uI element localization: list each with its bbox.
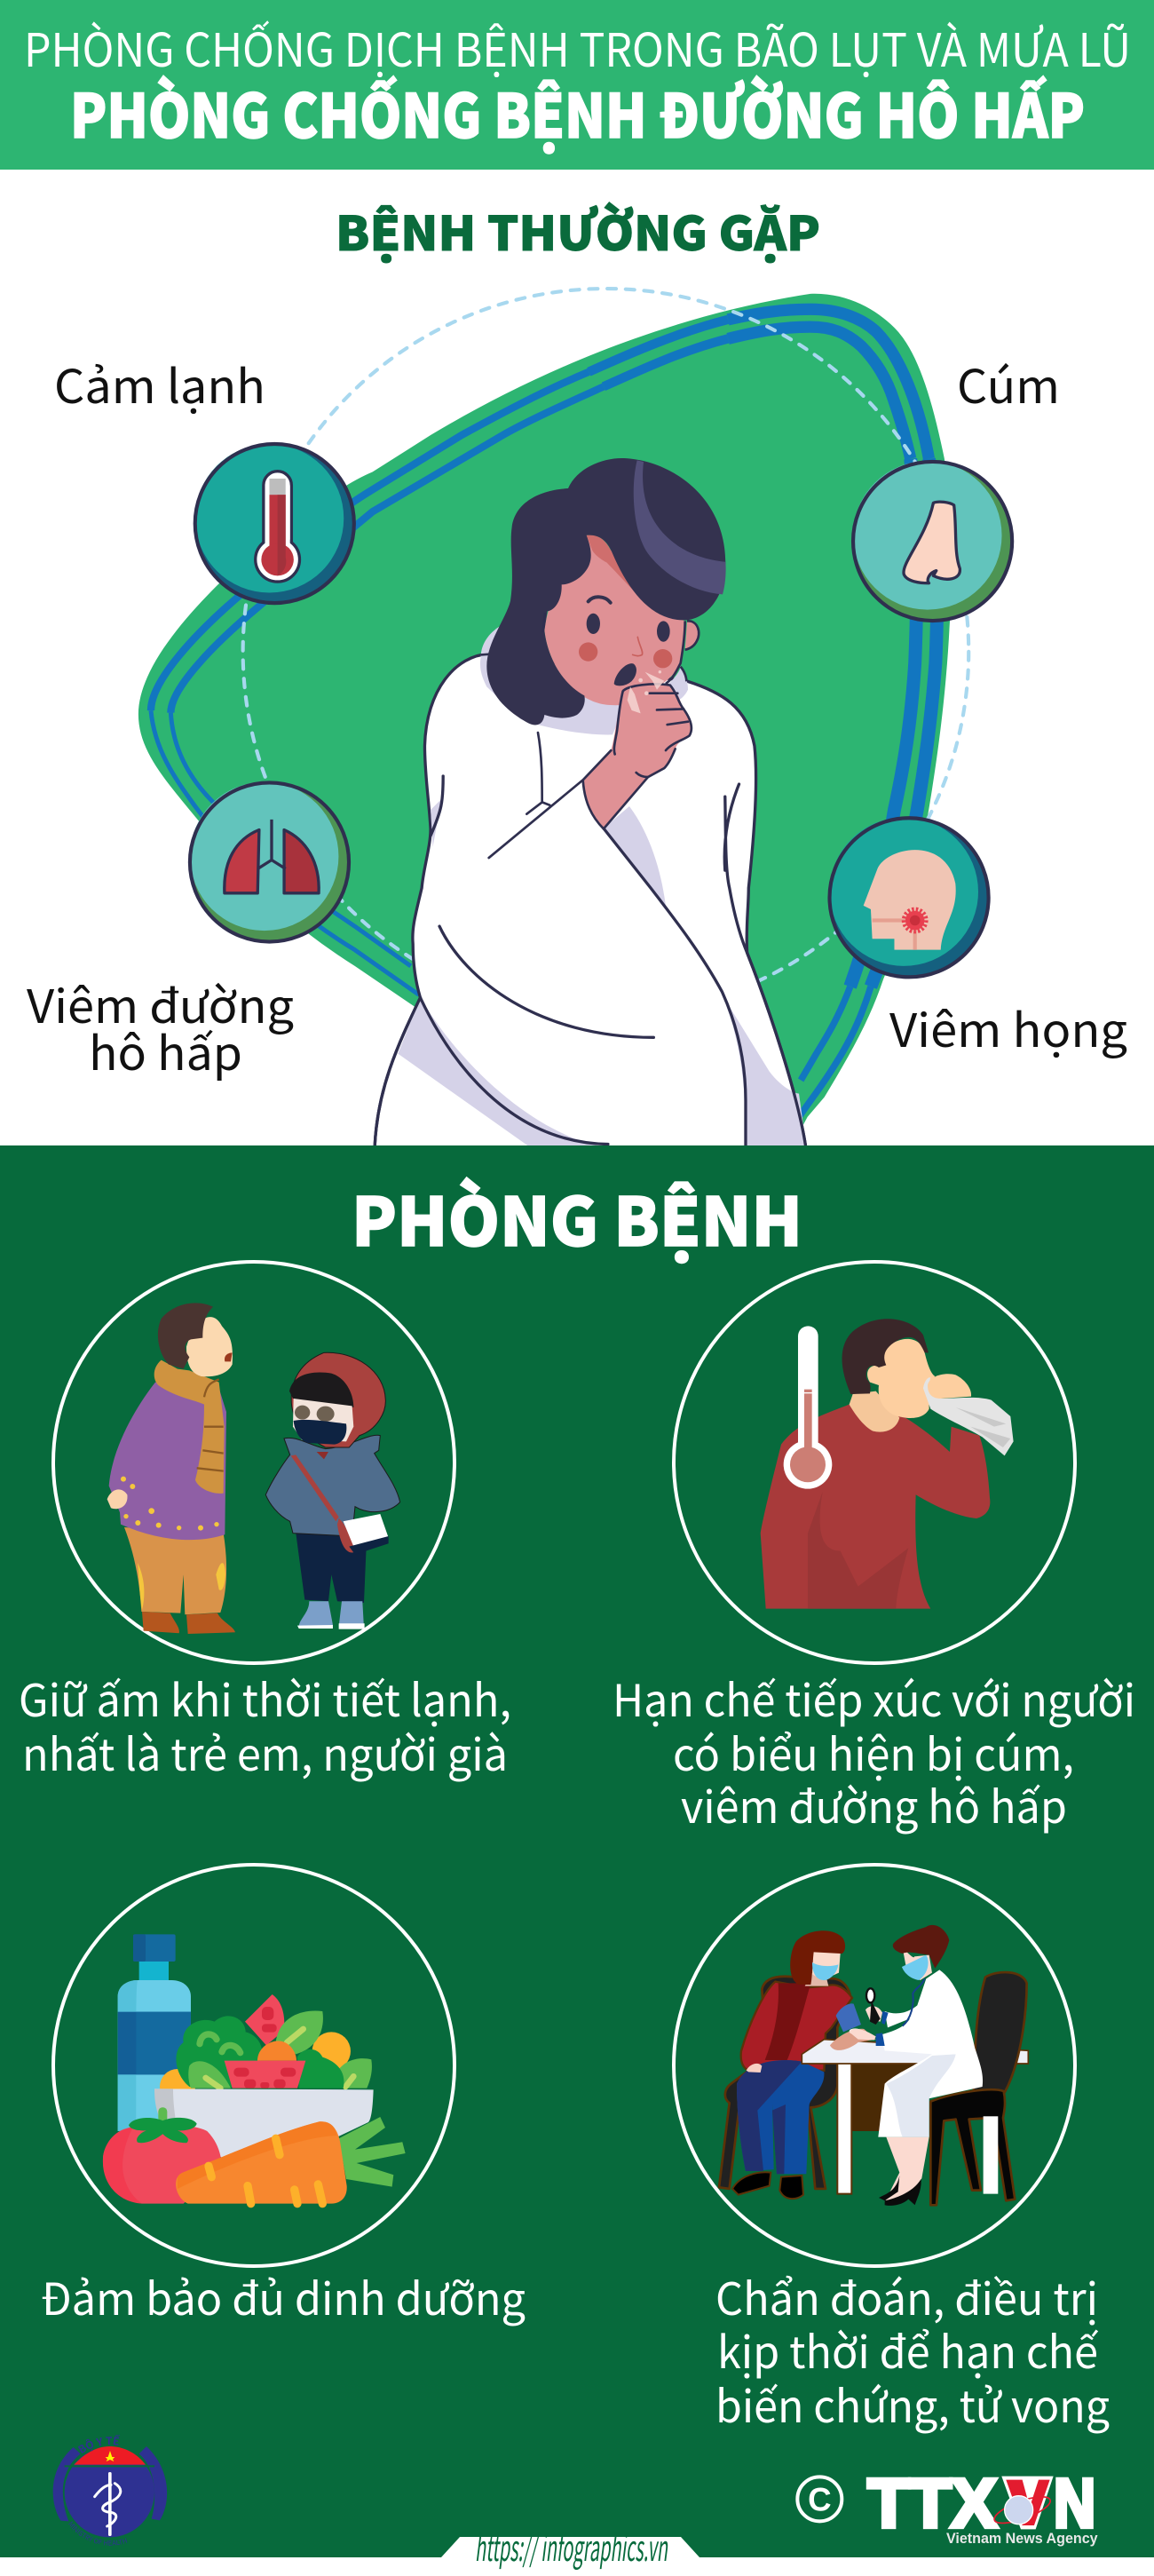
green blob with blue stripes bbox=[138, 294, 952, 1127]
eyes and features bbox=[587, 614, 600, 634]
adult in winter clothes bbox=[107, 1303, 235, 1634]
salad bowl bbox=[154, 1994, 374, 2158]
section heading: common diseases: BỆNH THƯỜNG GẶP bbox=[336, 197, 820, 265]
logo: Ministry of Health bbox=[53, 2435, 167, 2546]
doctor chair bbox=[930, 1972, 1027, 2205]
icon: lungs bbox=[190, 782, 349, 942]
icon: thermometer bbox=[195, 444, 354, 603]
head, hair, arm bbox=[480, 458, 726, 858]
woman coughing figure bbox=[375, 458, 806, 1149]
robe shading bbox=[398, 995, 806, 1147]
label: common cold: Cảm lạnh bbox=[54, 350, 265, 416]
circle: nutrition bbox=[53, 1865, 454, 2266]
logo: TTXVN Vietnam News Agency: N bbox=[1054, 2467, 1095, 2542]
robe bbox=[375, 654, 806, 1149]
copyright mark bbox=[797, 2477, 842, 2521]
carrot bbox=[176, 2121, 347, 2204]
sick man blowing nose bbox=[761, 1319, 1014, 1609]
label: respiratory inflammation: Viêm đường bbox=[27, 970, 294, 1036]
header banner bbox=[0, 0, 1154, 170]
logo: TTXVN Vietnam News Agency: Vietnam News Agency bbox=[946, 2530, 1098, 2547]
doctor bbox=[850, 1925, 983, 2206]
logo: Ministry of Health: BỘ Y TẾ bbox=[78, 2435, 120, 2453]
carrot leaves bbox=[339, 2117, 406, 2187]
logo: TTXVN Vietnam News Agency bbox=[797, 2467, 1098, 2547]
logo: Ministry of Health: MINISTRY OF HEALTH bbox=[68, 2522, 128, 2546]
caption: diagnosis: kịp thời để hạn chế bbox=[717, 2318, 1098, 2382]
caption: diagnosis: biến chứng, tử vong bbox=[715, 2372, 1110, 2436]
table bbox=[802, 2028, 1028, 2194]
icon: nose bbox=[853, 461, 1012, 621]
collar bbox=[480, 624, 688, 734]
cough spray bbox=[628, 670, 664, 713]
caption: limit contact bbox=[613, 1666, 1135, 1836]
tomato bbox=[103, 2107, 222, 2204]
website URL: https:// infographics.vn bbox=[475, 2520, 668, 2572]
label: respiratory inflammation: hô hấp bbox=[89, 1017, 242, 1083]
caption: limit contact: Hạn chế tiếp xúc với người bbox=[613, 1666, 1135, 1730]
circle: limit contact bbox=[674, 1262, 1075, 1663]
fist and forearm bbox=[583, 685, 692, 828]
label: sore throat: Viêm họng bbox=[889, 994, 1127, 1060]
caption: keep warm bbox=[19, 1666, 511, 1784]
icon: throat bbox=[830, 817, 989, 977]
caption: diagnosis: Chẩn đoán, điều trị bbox=[715, 2264, 1098, 2328]
caption: nutrition: Đảm bảo đủ dinh dưỡng bbox=[41, 2264, 526, 2328]
illustration panel: diseases bbox=[138, 289, 1012, 1149]
water bottle bbox=[118, 1934, 191, 2131]
patient chair bbox=[719, 1977, 850, 2189]
copyright mark: C bbox=[808, 2481, 832, 2517]
child with mask and bag bbox=[265, 1352, 400, 1629]
footer bar with URL tab bbox=[0, 2520, 1154, 2576]
circle: keep warm bbox=[53, 1262, 454, 1663]
panel: prevention bbox=[0, 1145, 1154, 2557]
dashed orbit circle bbox=[243, 289, 968, 1015]
caption: diagnosis bbox=[715, 2264, 1110, 2436]
label: flu: Cúm bbox=[957, 350, 1060, 416]
label: respiratory inflammation bbox=[27, 970, 294, 1083]
robe outlines bbox=[375, 776, 806, 1149]
hair bbox=[486, 458, 725, 725]
caption: keep warm: Giữ ấm khi thời tiết lạnh, bbox=[19, 1666, 511, 1730]
caption: keep warm: nhất là trẻ em, người già bbox=[22, 1720, 508, 1784]
face bbox=[544, 535, 685, 705]
caption: limit contact: có biểu hiện bị cúm, bbox=[673, 1720, 1074, 1784]
circle: diagnosis bbox=[674, 1865, 1075, 2266]
caption: limit contact: viêm đường hô hấp bbox=[681, 1772, 1067, 1836]
patient bbox=[732, 1930, 861, 2199]
heading: prevention: PHÒNG BỆNH bbox=[352, 1169, 802, 1265]
logo: TTXVN Vietnam News Agency: TTX bbox=[868, 2467, 997, 2542]
